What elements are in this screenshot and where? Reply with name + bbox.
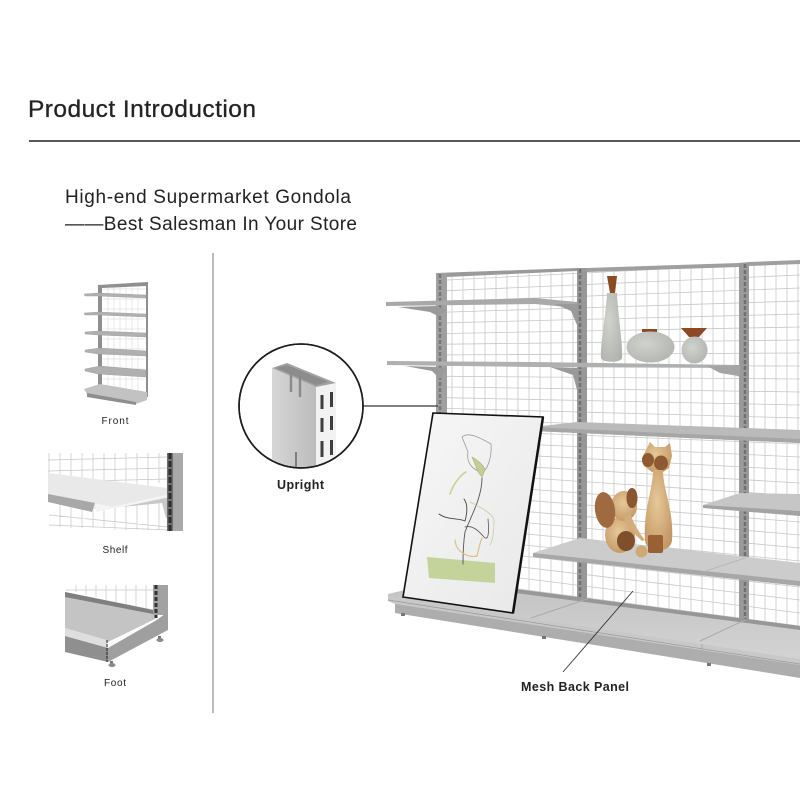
- shelf: third row: [533, 422, 800, 443]
- top rail centre: [587, 260, 800, 272]
- label: Foot: Foot: [104, 678, 126, 689]
- vase: small with flared top: [681, 328, 708, 364]
- label: Upright: Upright: [277, 478, 325, 492]
- label: Mesh Back Panel: Mesh Back Panel: [521, 680, 629, 694]
- callout line: mesh back panel: [563, 591, 633, 672]
- label: Shelf: Shelf: [102, 545, 128, 556]
- title: Product Introduction: [28, 96, 256, 123]
- shelf: top left: [386, 298, 577, 325]
- callout line: upright: [363, 405, 438, 407]
- wire mesh back panel: [447, 262, 800, 640]
- vertical divider: [212, 253, 214, 713]
- wooden toy: giraffe-cat: [642, 442, 672, 553]
- base deck and plinth: [388, 580, 800, 678]
- shelf: fourth row right: [703, 493, 800, 516]
- vase: round: [626, 329, 674, 362]
- wooden toy: elephant: [593, 488, 648, 558]
- header rule: [29, 140, 800, 142]
- thumbnail: front view of gondola: [84, 282, 148, 405]
- top rail left: [436, 268, 577, 278]
- thumbnail: foot detail: [65, 585, 168, 667]
- thumbnail: shelf detail: [48, 453, 183, 531]
- label: Front: Front: [102, 416, 129, 427]
- vase: tall: [601, 276, 622, 362]
- subtitle: ——Best Salesman In Your Store: [65, 214, 357, 235]
- subtitle: [65, 187, 357, 235]
- subtitle: High-end Supermarket Gondola: [65, 187, 351, 208]
- callout: upright detail circle: [239, 344, 363, 470]
- upright posts: [436, 263, 749, 623]
- poster board: [403, 413, 543, 613]
- shelf: lower row: [533, 538, 800, 586]
- shelf: second row: [387, 361, 740, 390]
